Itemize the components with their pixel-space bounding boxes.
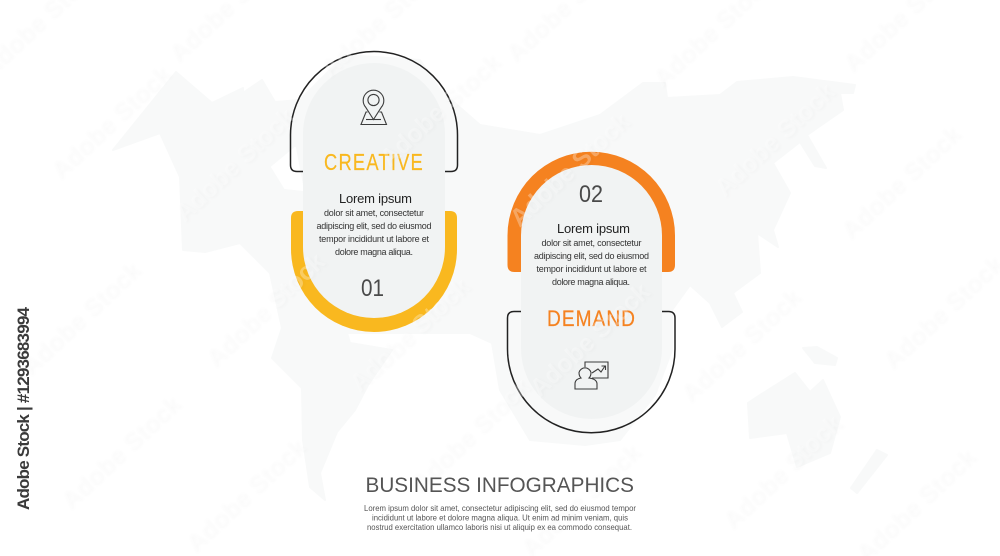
icon: map pin xyxy=(361,90,386,124)
watermarks: Adobe Stock xyxy=(180,433,310,556)
watermarks: Adobe Stock xyxy=(345,273,475,397)
panel: creative xyxy=(290,52,458,332)
watermarks: Adobe Stock xyxy=(55,390,185,514)
text block: creative: dolore magna aliqua. xyxy=(335,247,413,257)
description text xyxy=(364,503,636,532)
text block: demand: adipiscing elit, sed do eiusmod xyxy=(534,251,649,261)
watermarks: Adobe Stock xyxy=(717,410,847,534)
text block: demand: Lorem ipsum xyxy=(557,221,630,236)
stock id side label: Adobe Stock | #1293683994 xyxy=(14,306,33,510)
text block: creative: tempor incididunt ut labore et xyxy=(319,234,429,244)
watermarks: Adobe Stock xyxy=(45,60,175,184)
title: BUSINESS INFOGRAPHICS xyxy=(366,474,634,497)
description text: Lorem ipsum dolor sit amet, consectetur adipiscing elit, sed do eiusmod tempor xyxy=(364,503,636,513)
heading: creative: CREATIVE xyxy=(324,149,424,175)
text block: creative: adipiscing elit, sed do eiusmod xyxy=(316,221,432,231)
watermarks: Adobe Stock xyxy=(710,78,840,202)
watermarks: Adobe Stock xyxy=(170,103,300,227)
watermarks: Adobe Stock xyxy=(675,283,805,407)
watermarks: Adobe Stock xyxy=(405,373,535,497)
text block: creative: dolor sit amet, consectetur xyxy=(324,208,424,218)
watermarks: Adobe Stock xyxy=(200,248,330,372)
description text: nostrud exercitation ullamco laboris nisi ut aliquip ex ea commodo consequat. xyxy=(367,522,632,532)
icon: presenter with chart xyxy=(575,362,608,389)
text block: creative xyxy=(316,191,432,257)
description text: incididunt ut labore et dolore magna aliqua. Ut enim ad minim veniam, quis xyxy=(372,512,628,522)
text block: creative: Lorem ipsum xyxy=(339,191,412,206)
watermarks: Adobe Stock xyxy=(505,108,635,232)
text block: demand: dolor sit amet, consectetur xyxy=(542,238,642,248)
panel: demand xyxy=(508,152,675,433)
heading: demand: DEMAND xyxy=(547,306,636,331)
text block: demand: tempor incididunt ut labore et xyxy=(536,264,647,274)
text block: demand: dolore magna aliqua. xyxy=(552,277,630,287)
text block: demand xyxy=(534,221,649,287)
watermarks: Adobe Stock xyxy=(525,278,655,402)
watermarks: Adobe Stock xyxy=(835,120,965,244)
watermarks: Adobe Stock xyxy=(15,256,145,380)
watermarks: Adobe Stock xyxy=(375,48,505,172)
number: 02: 02 xyxy=(579,181,603,208)
number: 01: 01 xyxy=(361,275,384,302)
